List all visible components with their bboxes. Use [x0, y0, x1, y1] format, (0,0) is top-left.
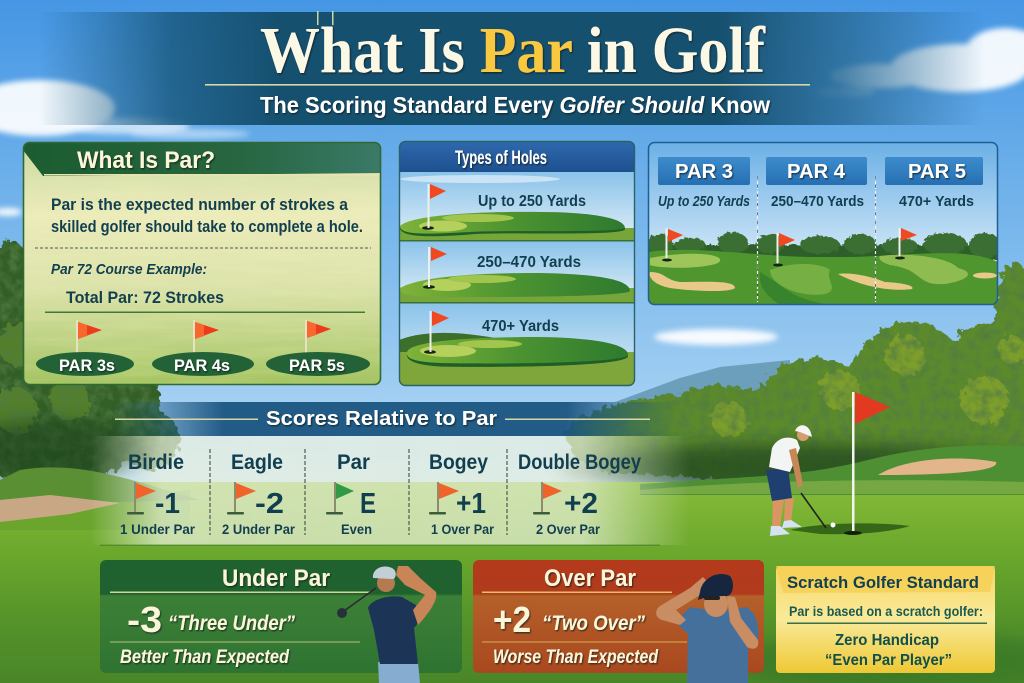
bogey: +1 [456, 488, 486, 520]
right scene: flagstick and putting golfer [766, 392, 910, 536]
golfer: hand on head [656, 574, 758, 683]
fairway [648, 250, 998, 305]
bogey [429, 451, 494, 537]
heading: Types of Holes: Types of Holes [455, 148, 547, 169]
flagstick [790, 392, 910, 535]
row label: 250–470 Yards [477, 254, 581, 271]
course example label: Par 72 Course Example: [51, 261, 207, 278]
hole row 1 [399, 172, 635, 240]
row label: 470+ Yards [482, 318, 559, 335]
birdie: Birdie [128, 451, 184, 474]
eagle: Eagle [231, 451, 283, 474]
handicap text: Zero Handicap [835, 632, 939, 649]
total par: Total Par: 72 Strokes [66, 289, 224, 307]
tab: par 3 [658, 157, 750, 185]
definition text: skilled golfer should take to complete a hole. [51, 218, 363, 236]
heading: under par: Under Par [222, 565, 330, 592]
tab: par 3: PAR 3 [675, 161, 733, 183]
par 3s badge: PAR 3s [59, 356, 115, 375]
tab: par 5: PAR 5 [908, 161, 966, 183]
panel: par 3 / 4 / 5 course view [647, 142, 1001, 305]
par 4s badge [152, 320, 254, 376]
birdie: -1 [155, 488, 180, 520]
eagle [222, 451, 296, 537]
bogey: 1 Over Par [431, 521, 494, 537]
panel: under par [100, 560, 462, 673]
value [127, 599, 295, 640]
double bogey: 2 Over Par [536, 521, 600, 537]
eagle: 2 Under Par [222, 521, 296, 537]
row label: Up to 250 Yards [478, 193, 586, 210]
value [493, 599, 645, 640]
bogey: Bogey [429, 451, 488, 474]
par: Even [341, 521, 372, 537]
tab: par 4: PAR 4 [787, 161, 846, 183]
value: -3 [127, 599, 162, 640]
par [326, 451, 376, 537]
golfer: follow-through [337, 566, 436, 683]
double bogey: Double Bogey [518, 451, 641, 474]
heading band: Scores Relative to Par: Scores Relative to Par [266, 408, 497, 430]
panel: over par [473, 560, 764, 673]
value: +2 [493, 599, 531, 640]
flags [662, 228, 917, 266]
panel: Types of Holes [399, 141, 635, 386]
handicap text [825, 632, 952, 669]
double bogey [518, 451, 641, 537]
title: What Is Par in Golf [260, 14, 766, 87]
par 4s badge: PAR 4s [174, 356, 230, 375]
heading: Scratch Golfer Standard [787, 573, 979, 592]
eagle: -2 [255, 488, 284, 520]
birdie [120, 451, 196, 537]
tab: par 5 [885, 157, 983, 185]
title banner [40, 11, 984, 125]
definition text [51, 196, 363, 236]
tab: par 4 [766, 157, 867, 185]
yardage labels: 470+ Yards [899, 193, 974, 210]
par: Par [337, 451, 370, 474]
heading: What Is Par?: What Is Par? [77, 147, 215, 174]
definition text: Par is the expected number of strokes a [51, 196, 349, 214]
subtitle: The Scoring Standard Every Golfer Should Know [260, 92, 770, 118]
bunkers [650, 272, 997, 291]
panel: What Is Par? [23, 142, 381, 385]
par: E [360, 488, 376, 520]
yardage labels: 250–470 Yards [771, 193, 864, 210]
yardage labels: Up to 250 Yards [658, 193, 750, 210]
hole row 3 [399, 303, 635, 386]
panel: score terms [90, 436, 690, 546]
caption: Worse Than Expected [493, 647, 658, 668]
treeline [647, 232, 1001, 260]
heading band: Scores Relative to Par [110, 402, 680, 436]
putting golfer [766, 425, 836, 536]
caption: Better Than Expected [120, 647, 289, 668]
par 5s badge [266, 320, 370, 376]
value: “Two Over” [542, 612, 645, 635]
value: “Three Under” [168, 612, 295, 635]
par 3s badge [36, 320, 134, 376]
hole row 2 [399, 241, 635, 302]
note: Par is based on a scratch golfer: [789, 603, 983, 619]
birdie: 1 Under Par [120, 521, 196, 537]
handicap text: “Even Par Player” [825, 652, 952, 669]
par 5s badge: PAR 5s [289, 356, 345, 375]
heading: over par: Over Par [544, 565, 636, 592]
panel: scratch golfer standard [776, 566, 995, 673]
double bogey: +2 [564, 488, 598, 520]
yardage labels [658, 193, 974, 210]
